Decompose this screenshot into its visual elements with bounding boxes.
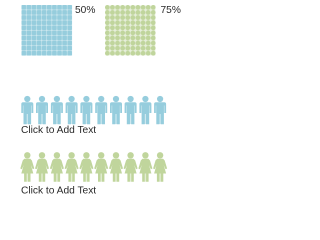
pictogram row: women: [20, 152, 167, 182]
waffle chart: blue 50%: [22, 5, 72, 56]
caption: women row: Click to Add Text: [21, 186, 96, 196]
label: 75%: 75%: [160, 5, 181, 16]
caption: men row: Click to Add Text: [21, 125, 96, 136]
waffle chart: green 75%: [105, 5, 156, 56]
label: 50%: 50%: [75, 5, 95, 16]
pictogram row: men: [21, 96, 166, 124]
